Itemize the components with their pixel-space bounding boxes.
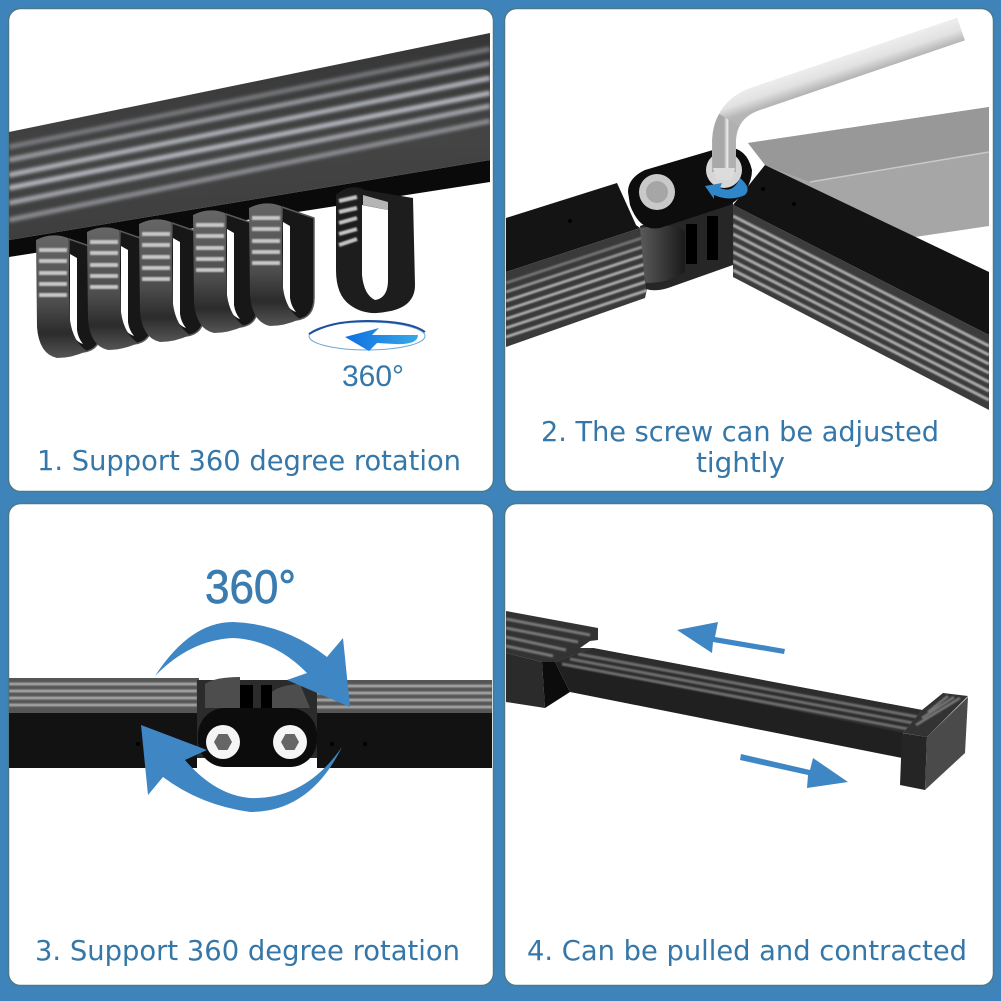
end cap (900, 693, 968, 790)
outer tube (506, 611, 598, 708)
panel 4 artwork (506, 611, 968, 790)
left bar (506, 183, 660, 347)
ribbed rail (9, 33, 490, 240)
track under the rail (9, 160, 490, 257)
caption 2 line 2: tightly (696, 446, 785, 479)
caption 2 line 1: 2. The screw can be adjusted (541, 415, 939, 448)
icon: rotation arrow (309, 321, 425, 351)
panel 2: adjustable screw (504, 8, 994, 492)
panel 4: telescopic bar (504, 504, 994, 986)
rotation label: 360° (342, 360, 404, 393)
inner sliding bar (555, 648, 922, 758)
right bar (733, 165, 989, 410)
panel 4 card (504, 504, 994, 986)
panel 1: hook rotation (8, 8, 494, 492)
panel 2 artwork (506, 29, 989, 410)
rotation label: 360° (205, 560, 296, 613)
caption 1: 1. Support 360 degree rotation (37, 444, 461, 477)
straight rail (9, 678, 492, 768)
panel 1 card (8, 8, 494, 492)
caption 3: 3. Support 360 degree rotation (35, 934, 460, 967)
single rotated hook (336, 187, 415, 313)
icon: right arrow (740, 754, 848, 788)
hinge connector (628, 148, 752, 290)
icon: tighten arrow (705, 178, 748, 199)
panel 3: connector rotation (8, 504, 494, 986)
hooks row (36, 203, 314, 358)
panel 3 artwork (9, 622, 492, 812)
icon: hex key (713, 29, 961, 180)
icon: lower rotation arrow (141, 725, 342, 812)
panel 3 card (8, 504, 494, 986)
hinge connector (197, 677, 317, 767)
panel 2 card (504, 8, 994, 492)
panel 1 artwork (9, 33, 490, 358)
caption 4: 4. Can be pulled and contracted (527, 934, 967, 967)
grey shadow bar (748, 107, 989, 237)
icon: left arrow (677, 622, 785, 654)
icon: upper rotation arrow (155, 622, 350, 707)
